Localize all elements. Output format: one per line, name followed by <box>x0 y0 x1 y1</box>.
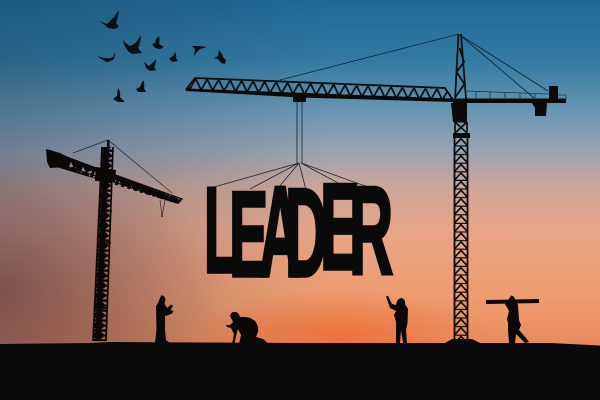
collar <box>453 133 470 138</box>
mast apex <box>107 140 110 148</box>
cab <box>451 103 467 123</box>
rear tie cables <box>460 35 548 98</box>
counter jib <box>453 98 566 103</box>
bird 8 <box>214 50 226 64</box>
counterweight <box>549 86 558 102</box>
bird 6 <box>169 52 178 62</box>
left tower crane <box>46 140 182 341</box>
cables <box>73 140 172 193</box>
mast lattice <box>454 138 468 341</box>
worker 2: kneeling with hammer <box>226 312 269 344</box>
jib tie cable <box>280 34 459 80</box>
mast legs <box>93 147 113 341</box>
bird 7 <box>192 46 207 56</box>
beam <box>486 299 539 304</box>
bird 3 <box>97 52 115 62</box>
mast top <box>455 34 466 99</box>
upper mast section <box>455 122 467 133</box>
letter D: D <box>285 163 327 303</box>
hanging ballast <box>532 103 547 116</box>
bird 9 <box>136 80 146 92</box>
bird 4 <box>152 36 164 49</box>
letter E: E <box>229 168 268 303</box>
cab <box>95 167 116 182</box>
jib chords <box>186 78 453 100</box>
trolley <box>293 97 306 102</box>
word LEADER <box>204 160 393 304</box>
bird 2 <box>123 35 142 54</box>
mast legs <box>454 138 468 341</box>
bird 1 <box>99 10 119 29</box>
worker 4: carrying a beam <box>486 296 539 343</box>
mast <box>93 147 113 341</box>
ground <box>0 339 600 400</box>
hook <box>160 200 165 216</box>
jib chords <box>46 150 182 203</box>
letter L: L <box>204 163 238 298</box>
figure <box>505 296 529 343</box>
railing <box>466 91 566 100</box>
letter A: A <box>259 160 301 304</box>
letter R: R <box>349 161 393 301</box>
jib lattice <box>186 78 453 100</box>
bird 5 <box>144 59 156 71</box>
worker 3: arm raised <box>386 296 408 343</box>
jib weights <box>46 149 165 199</box>
jib lattice <box>50 150 182 204</box>
bird 10 <box>113 88 125 102</box>
main tower crane <box>186 34 566 341</box>
worker 1: standing, gesturing <box>155 295 174 343</box>
rigging cables to letters <box>214 163 368 190</box>
hoist lines <box>297 101 302 163</box>
flock of birds <box>97 10 226 102</box>
letter E second: E <box>320 160 360 296</box>
